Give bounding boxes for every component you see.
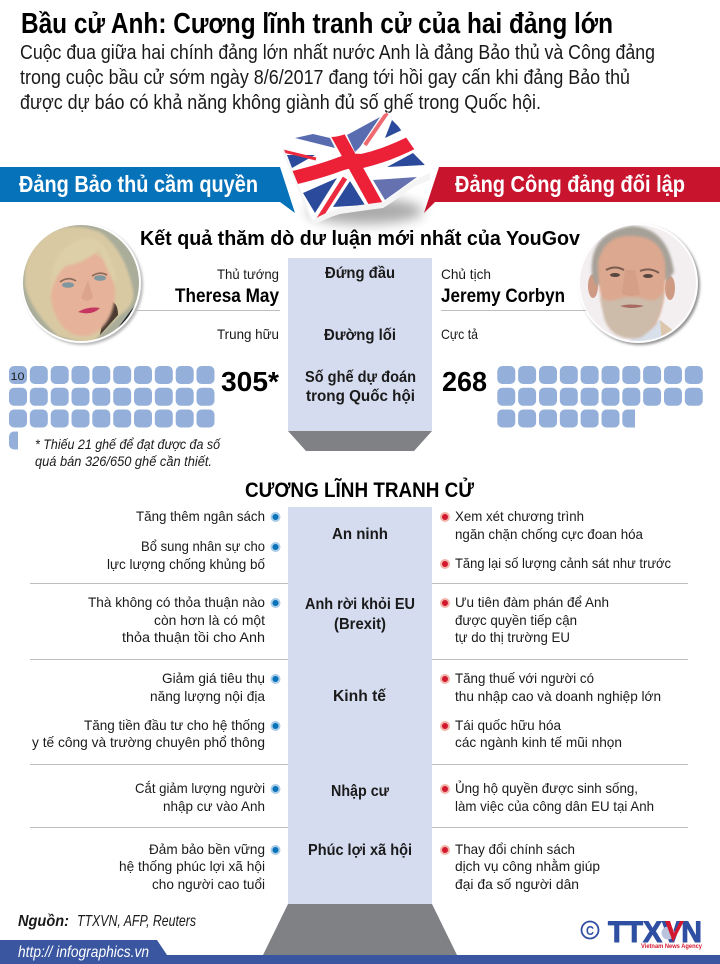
conservative pledges: hệ thống phúc lợi xã hội xyxy=(119,858,265,874)
labour pledges: Tăng lại số lượng cảnh sát như trước xyxy=(455,555,671,571)
conservative pledges xyxy=(32,508,265,892)
panel: platform topics column xyxy=(263,507,457,955)
leader info: Jeremy Corbyn: Chủ tịch xyxy=(441,266,491,282)
leader info: Jeremy Corbyn xyxy=(441,266,586,342)
conservative pledges: Thà không có thỏa thuận nào xyxy=(88,594,265,610)
labour pledges: tự do thị trường EU xyxy=(455,629,570,645)
labour pledges: Tái quốc hữu hóa xyxy=(455,717,561,733)
conservative pledges: lực lượng chống khủng bố xyxy=(107,556,265,572)
conservative pledges: Tăng thêm ngân sách xyxy=(136,508,265,524)
banner: labour party: Đảng Công đảng đối lập xyxy=(455,171,685,197)
labour pledges: được quyền tiếp cận xyxy=(455,612,577,628)
seat blocks: conservative 305: 10 xyxy=(10,371,24,383)
intro paragraph xyxy=(20,42,655,114)
panel: platform topics column: An ninh xyxy=(332,526,388,543)
banner: conservative party: Đảng Bảo thủ cầm quyền xyxy=(19,171,258,197)
leader info: Jeremy Corbyn: Cực tả xyxy=(441,326,478,342)
labour pledges: dịch vụ công nhằm giúp xyxy=(455,858,600,874)
logo: TTXVN: TTXVN xyxy=(608,916,702,949)
footer bar and url tab: http:// infographics.vn xyxy=(18,944,149,961)
conservative pledges: năng lượng nội địa xyxy=(150,688,265,704)
title: Bầu cử Anh: Cương lĩnh tranh cử của hai đảng lớn xyxy=(21,8,613,40)
conservative pledges: Cắt giảm lượng người xyxy=(135,780,265,796)
conservative pledges: cho người cao tuổi xyxy=(152,876,265,892)
blue bullets xyxy=(272,513,280,854)
conservative pledges: nhập cư vào Anh xyxy=(163,798,265,814)
portrait: Theresa May xyxy=(20,220,143,345)
leader info: Jeremy Corbyn: Jeremy Corbyn xyxy=(441,286,565,307)
labour pledges: làm việc của công dân EU tại Anh xyxy=(455,798,654,814)
intro paragraph: được dự báo có khả năng không giành đủ số ghế trong Quốc hội. xyxy=(20,92,541,114)
panel: platform topics column: Nhập cư xyxy=(331,783,389,800)
conservative pledges: Tăng tiền đầu tư cho hệ thống xyxy=(84,717,265,733)
labour pledges: đại đa số người dân xyxy=(455,876,579,892)
panel: platform topics column: (Brexit) xyxy=(334,616,386,633)
footnote: quá bán 326/650 ghế cần thiết. xyxy=(35,454,212,469)
conservative pledges: thỏa thuận tồi cho Anh xyxy=(122,629,265,645)
poll heading: Kết quả thăm dò dư luận mới nhất của YouGov xyxy=(140,228,581,250)
panel: poll criteria column: Đường lối xyxy=(324,327,396,344)
panel: poll criteria column: Đứng đầu xyxy=(325,265,395,282)
conservative pledges: còn hơn là có một xyxy=(154,612,265,628)
leader info: Theresa May: Thủ tướng xyxy=(217,266,279,282)
labour pledges: các ngành kinh tế mũi nhọn xyxy=(455,734,622,750)
logo: TTXVN: C xyxy=(586,923,595,938)
red bullets xyxy=(441,513,449,854)
conservative pledges: Đảm bảo bền vững xyxy=(149,841,265,857)
footnote: * Thiếu 21 ghế để đạt được đa số xyxy=(35,437,221,452)
conservative pledges: Giảm giá tiêu thụ xyxy=(162,670,265,686)
labour pledges: Thay đổi chính sách xyxy=(455,841,575,857)
labour pledges: Xem xét chương trình xyxy=(455,508,584,524)
icon: union jack flag xyxy=(283,112,430,226)
platform heading: CƯƠNG LĨNH TRANH CỬ xyxy=(245,478,475,502)
conservative pledges: y tế công và trường chuyên phổ thông xyxy=(32,734,265,750)
footnote xyxy=(35,437,221,469)
conservative pledges: Bổ sung nhân sự cho xyxy=(141,538,265,554)
intro paragraph: trong cuộc bầu cử sớm ngày 8/6/2017 đang tới hồi gay cấn khi đảng Bảo thủ xyxy=(20,67,630,89)
portrait: Jeremy Corbyn xyxy=(578,223,700,345)
seat blocks: labour 268 xyxy=(497,366,703,428)
labour pledges: Tăng thuế với người có xyxy=(455,670,594,686)
labour pledges: thu nhập cao và doanh nghiệp lớn xyxy=(455,688,661,704)
panel: poll criteria column: Số ghế dự đoán xyxy=(305,369,416,386)
seat count: 268: 268 xyxy=(442,366,487,397)
panel: poll criteria column xyxy=(288,258,432,451)
leader info: Theresa May: Trung hữu xyxy=(217,326,279,342)
labour pledges xyxy=(455,508,671,892)
panel: platform topics column: Phúc lợi xã hội xyxy=(308,842,412,859)
banner: labour party xyxy=(424,167,720,213)
panel: platform topics column: Kinh tế xyxy=(333,688,386,705)
footer bar and url tab xyxy=(0,940,720,964)
panel: platform topics column: Anh rời khỏi EU xyxy=(305,596,415,613)
labour pledges: ngăn chặn chống cực đoan hóa xyxy=(455,526,643,542)
leader info: Theresa May: Theresa May xyxy=(175,286,279,307)
logo: TTXVN: Vietnam News Agency xyxy=(641,943,702,950)
intro paragraph: Cuộc đua giữa hai chính đảng lớn nhất nước Anh là đảng Bảo thủ và Công đảng xyxy=(20,42,655,64)
leader info: Theresa May xyxy=(136,266,280,342)
seat blocks: conservative 305 xyxy=(9,366,214,450)
source line xyxy=(18,913,196,930)
labour pledges: Ủng hộ quyền được sinh sống, xyxy=(455,779,638,796)
source line: Nguồn: xyxy=(18,913,69,930)
seat count: 305: 305* xyxy=(221,366,279,397)
panel: poll criteria column: trong Quốc hội xyxy=(306,388,415,405)
labour pledges: Ưu tiên đàm phán để Anh xyxy=(455,594,609,610)
source line: TTXVN, AFP, Reuters xyxy=(77,913,196,930)
banner: conservative party xyxy=(0,167,295,213)
